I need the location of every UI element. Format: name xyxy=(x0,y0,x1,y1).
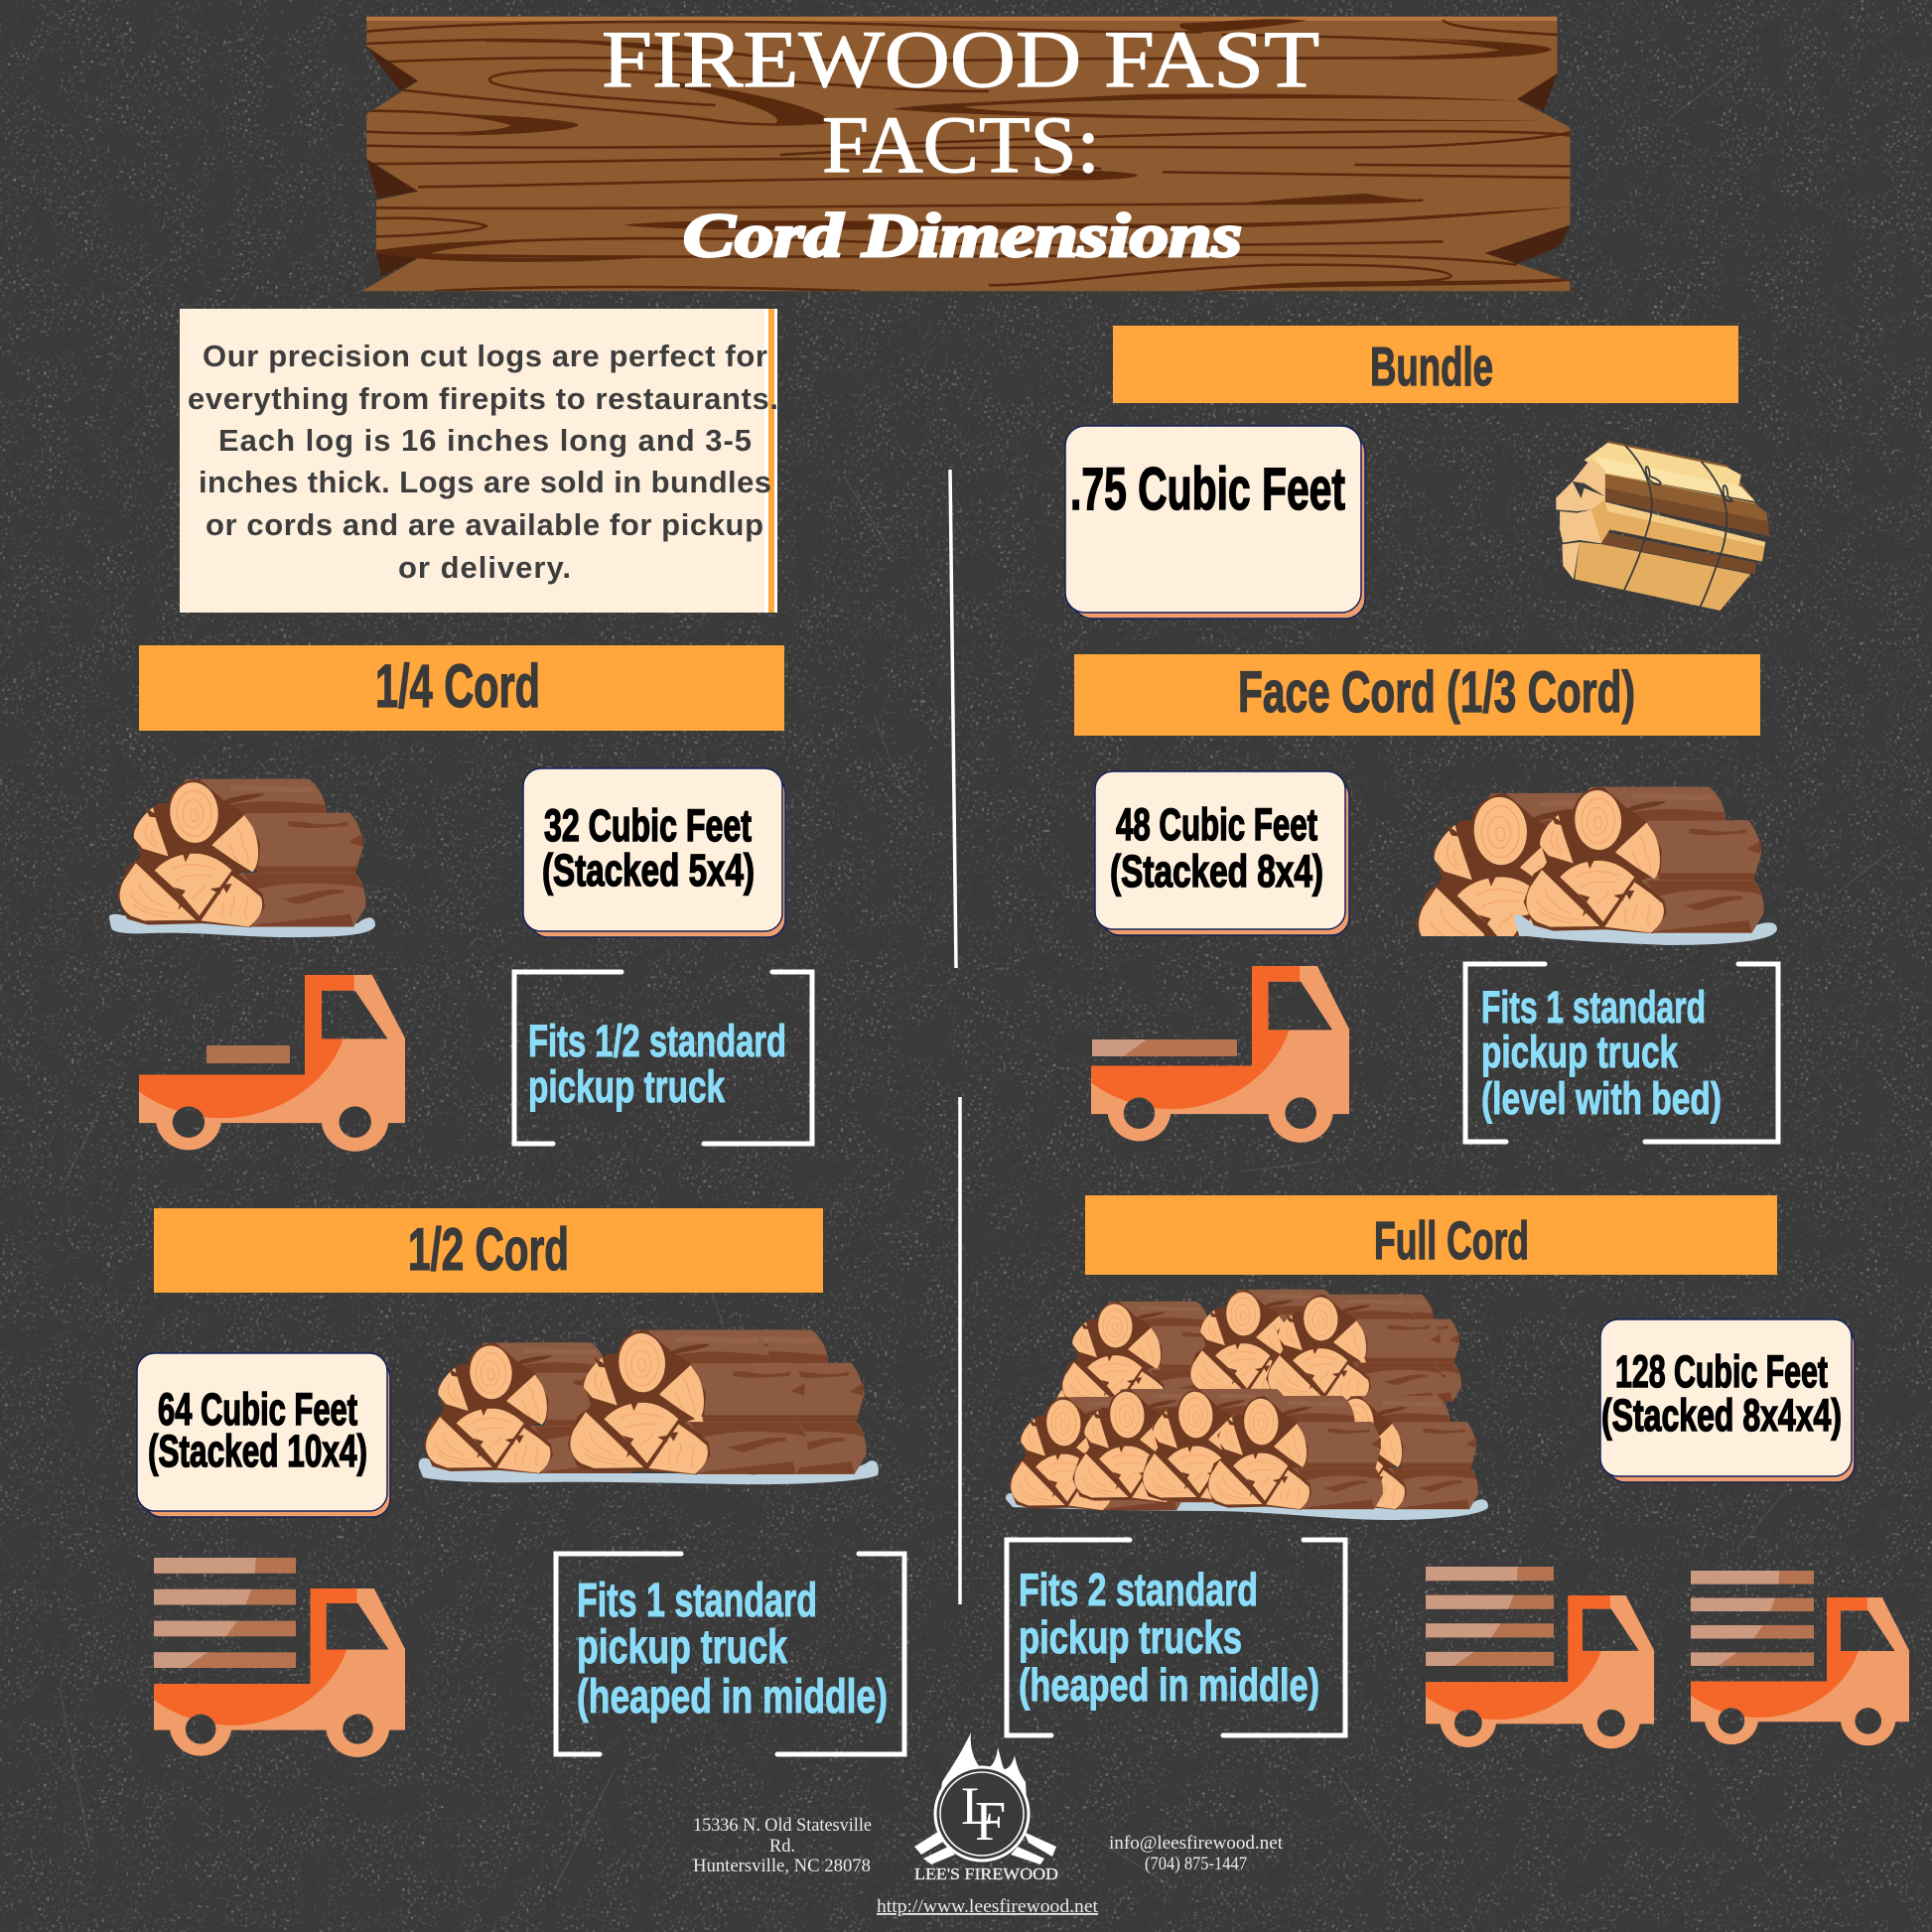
logo: Lee's Firewood xyxy=(914,1732,1058,1883)
callout: face cord truck fit: (level with bed) xyxy=(1481,1073,1722,1124)
card: face cord volume: 48 Cubic Feet xyxy=(1116,799,1317,850)
divider: lower xyxy=(958,1097,962,1604)
footer: contact: info@leesfirewood.net xyxy=(1109,1834,1284,1854)
icon: firewood bundle xyxy=(1556,441,1769,611)
callout: quarter cord truck fit xyxy=(514,972,812,1144)
divider: upper xyxy=(950,470,956,968)
heading: half cord xyxy=(154,1208,823,1293)
section: face cord xyxy=(1074,654,1778,1143)
panel: intro text: inches thick. Logs are sold in bundles xyxy=(199,465,771,499)
section: bundle xyxy=(1065,326,1769,619)
card: full cord volume: 128 Cubic Feet xyxy=(1615,1346,1828,1397)
logo: Lee's Firewood: L xyxy=(961,1776,994,1836)
panel: intro text: or delivery. xyxy=(398,550,571,585)
card: quarter cord volume: (Stacked 5x4) xyxy=(542,845,755,896)
logo: Lee's Firewood: F xyxy=(975,1791,1006,1853)
wooden sign xyxy=(361,17,1570,291)
panel: intro text: everything from firepits to restaurants. xyxy=(188,381,778,416)
card: full cord volume: (Stacked 8x4x4) xyxy=(1601,1390,1842,1441)
card: face cord volume xyxy=(1095,771,1349,935)
footer: website link: http://www.leesfirewood.net xyxy=(877,1897,1099,1917)
callout: quarter cord truck fit: Fits 1/2 standard xyxy=(528,1016,786,1066)
icon: truck with one plank xyxy=(139,975,405,1152)
card: quarter cord volume xyxy=(523,768,785,937)
section: full cord xyxy=(1006,1195,1909,1748)
callout: face cord truck fit: pickup truck xyxy=(1481,1027,1679,1077)
callout: full cord truck fit: Fits 2 standard xyxy=(1019,1564,1258,1615)
heading: bundle xyxy=(1113,326,1738,403)
heading: face cord xyxy=(1074,654,1760,736)
section: half cord xyxy=(137,1208,904,1757)
icon: full cord log pile xyxy=(1006,1290,1488,1520)
callout: face cord truck fit xyxy=(1465,964,1778,1142)
heading: full cord: Full Cord xyxy=(1374,1211,1529,1271)
heading: full cord xyxy=(1085,1195,1777,1275)
logo: Lee's Firewood: LEE'S FIREWOOD xyxy=(914,1864,1058,1883)
callout: half cord truck fit: Fits 1 standard xyxy=(577,1575,817,1627)
title xyxy=(602,14,1319,190)
card: bundle volume xyxy=(1065,426,1365,619)
footer: address: Rd. xyxy=(769,1837,795,1857)
callout: half cord truck fit: (heaped in middle) xyxy=(577,1671,888,1724)
card: quarter cord volume: 32 Cubic Feet xyxy=(544,800,752,851)
footer: address: 15336 N. Old Statesville xyxy=(693,1816,872,1836)
callout: full cord truck fit xyxy=(1007,1540,1345,1735)
card: half cord volume xyxy=(137,1353,390,1517)
icon: truck one with four planks xyxy=(1426,1567,1654,1748)
card: bundle volume: .75 Cubic Feet xyxy=(1070,456,1345,522)
panel: intro text: or cords and are available for pickup xyxy=(206,507,763,542)
footer: contact xyxy=(1109,1834,1284,1874)
callout: face cord truck fit: Fits 1 standard xyxy=(1481,982,1706,1033)
callout: quarter cord truck fit: pickup truck xyxy=(528,1061,726,1112)
card: full cord volume xyxy=(1600,1319,1855,1482)
icon: quarter cord log pile xyxy=(109,778,375,937)
callout: full cord truck fit: pickup trucks xyxy=(1019,1611,1242,1663)
footer: address: Huntersville, NC 28078 xyxy=(693,1857,871,1876)
heading: half cord: 1/2 Cord xyxy=(408,1216,569,1283)
title: FIREWOOD FAST xyxy=(602,14,1319,104)
panel: intro text xyxy=(180,309,778,613)
card: half cord volume: 64 Cubic Feet xyxy=(158,1384,357,1435)
title: FACTS: xyxy=(822,99,1100,190)
icon: truck two with four planks xyxy=(1691,1571,1909,1745)
icon: truck with full bed plank xyxy=(1091,966,1349,1143)
card: face cord volume: (Stacked 8x4) xyxy=(1110,846,1323,897)
card: half cord volume: (Stacked 10x4) xyxy=(148,1426,367,1476)
callout: half cord truck fit xyxy=(556,1554,904,1754)
subtitle: Cord Dimensions xyxy=(683,203,1242,270)
callout: half cord truck fit: pickup truck xyxy=(577,1621,787,1674)
icon: half cord log pile xyxy=(419,1329,879,1484)
heading: face cord: Face Cord (1/3 Cord) xyxy=(1238,660,1635,725)
footer: address xyxy=(693,1816,872,1876)
heading: bundle: Bundle xyxy=(1370,336,1493,397)
section: quarter cord xyxy=(109,645,812,1152)
heading: quarter cord xyxy=(139,645,784,731)
heading: quarter cord: 1/4 Cord xyxy=(375,652,540,720)
icon: truck with four planks xyxy=(154,1558,405,1757)
panel: intro text: Our precision cut logs are perfect for xyxy=(203,339,767,373)
panel: intro text: Each log is 16 inches long and 3-5 xyxy=(218,423,752,458)
footer: contact: (704) 875-1447 xyxy=(1145,1855,1247,1874)
callout: full cord truck fit: (heaped in middle) xyxy=(1019,1659,1319,1711)
icon: face cord log pile xyxy=(1416,786,1777,960)
